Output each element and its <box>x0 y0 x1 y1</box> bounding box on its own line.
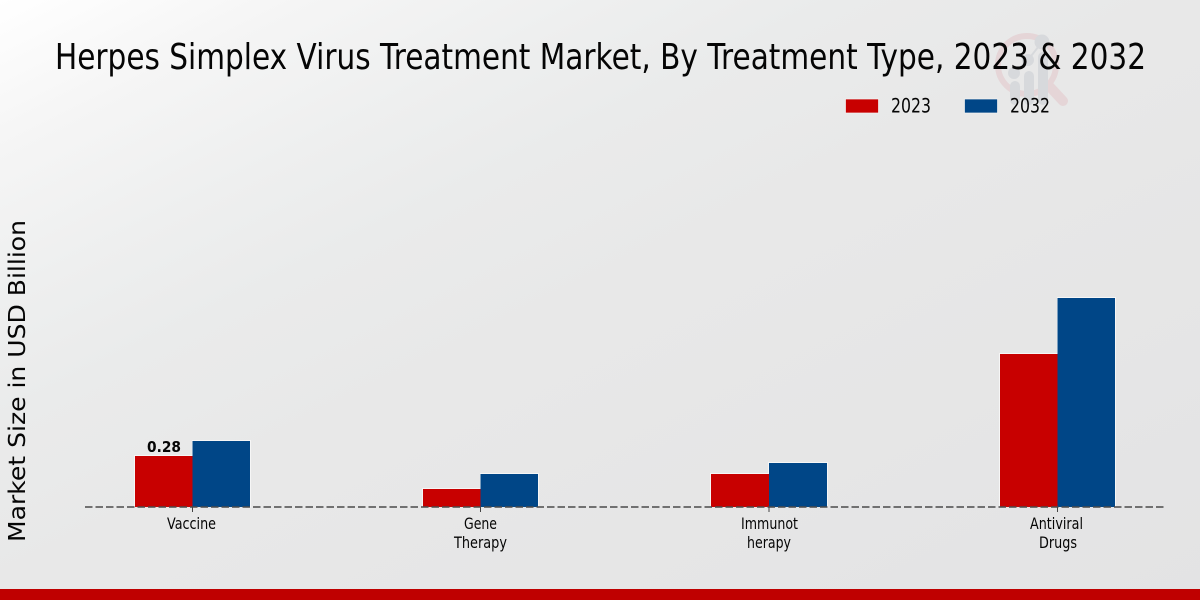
bars: Antiviral Drugs <box>1000 298 1116 508</box>
value label: 0.28: 0.28 <box>147 438 181 456</box>
axis baseline <box>85 506 1164 508</box>
bottom band <box>0 589 1200 600</box>
category label: Immunotherapy: Immunot <box>741 514 798 533</box>
legend <box>846 94 1050 118</box>
legend swatch: 2023 <box>846 99 878 113</box>
axis ticks <box>192 507 1058 512</box>
category label: Vaccine: Vaccine <box>167 514 216 533</box>
category label: Antiviral Drugs <box>1030 514 1083 552</box>
bars: Gene Therapy <box>422 474 538 508</box>
legend label: 2032: 2032 <box>1010 94 1050 118</box>
category label: Gene Therapy: Gene <box>464 514 497 533</box>
watermark logo <box>998 34 1063 105</box>
legend label: 2023: 2023 <box>891 94 931 118</box>
y axis label: Market Size in USD Billion <box>5 220 31 542</box>
category label: Gene Therapy: Therapy <box>453 533 507 552</box>
category label: Antiviral Drugs: Drugs <box>1039 533 1077 552</box>
bars: Vaccine <box>134 440 250 508</box>
bars: Immunotherapy <box>710 462 828 508</box>
category label: Antiviral Drugs: Antiviral <box>1030 514 1083 533</box>
category label: Gene Therapy <box>453 514 507 552</box>
bar chart <box>85 298 1164 552</box>
category label: Immunotherapy <box>741 514 798 552</box>
legend swatch: 2032 <box>964 99 998 113</box>
category label: Immunotherapy: herapy <box>747 533 791 552</box>
